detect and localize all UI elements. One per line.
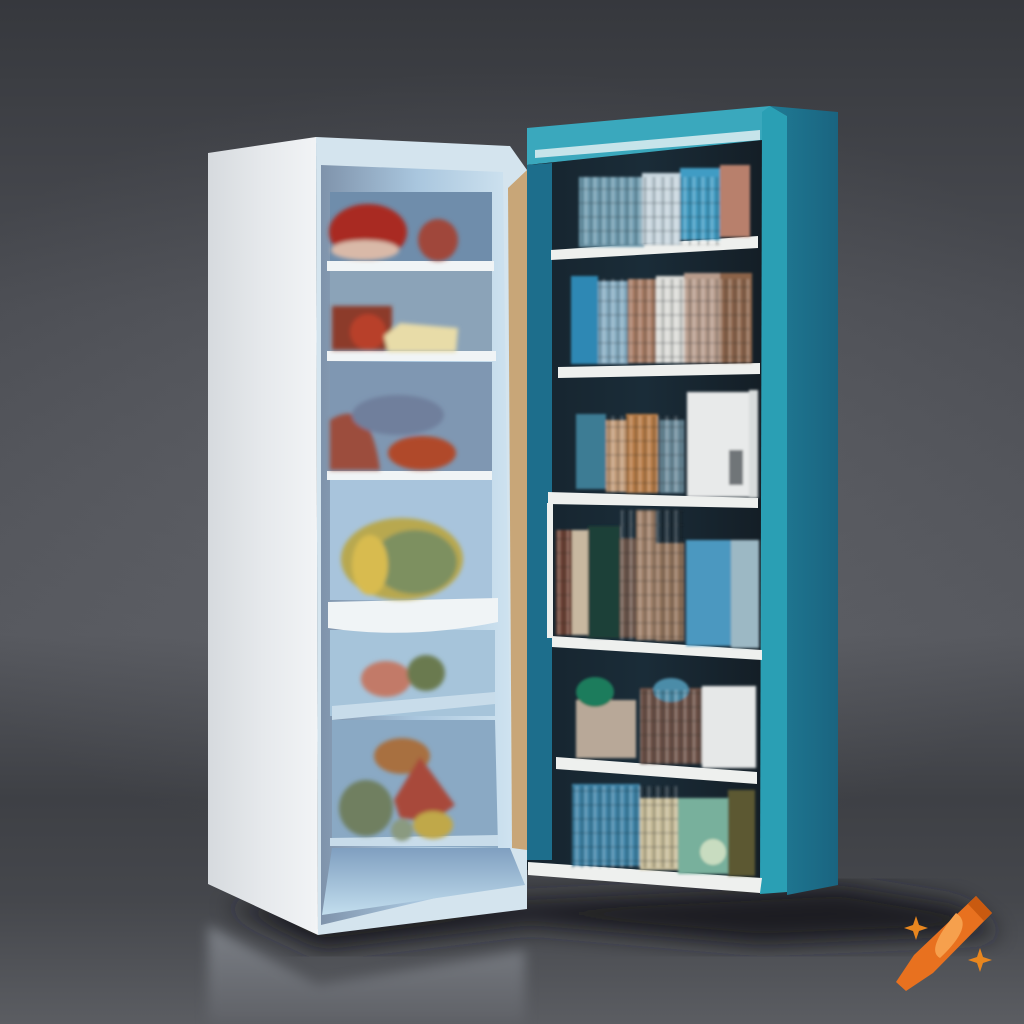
fridge shelves — [327, 261, 498, 846]
second shelf books — [571, 276, 598, 364]
food items — [329, 204, 463, 841]
refrigerator body — [208, 137, 527, 935]
small fruits — [361, 661, 411, 697]
front frame — [316, 137, 527, 935]
books and items on door shelves — [556, 165, 759, 876]
door interior — [527, 140, 762, 892]
red food top shelf — [329, 204, 407, 260]
icon: crayon logo — [896, 896, 992, 991]
door outer edge — [770, 106, 838, 895]
tomato and butter — [332, 306, 392, 350]
floor shadow and reflection — [208, 885, 1000, 1024]
door top — [527, 106, 775, 165]
fourth shelf books — [556, 530, 572, 635]
book spine detail — [556, 177, 750, 868]
third shelf items — [576, 414, 606, 489]
melon — [341, 518, 463, 600]
white side panel — [208, 137, 318, 935]
meat — [330, 414, 380, 470]
hinge strip — [508, 170, 527, 850]
top shelf books — [579, 177, 644, 247]
door shelves — [528, 236, 762, 893]
open door — [508, 106, 838, 895]
drawer fruits — [374, 738, 430, 774]
fifth shelf items — [576, 700, 636, 758]
bottom shelf items — [572, 784, 640, 866]
